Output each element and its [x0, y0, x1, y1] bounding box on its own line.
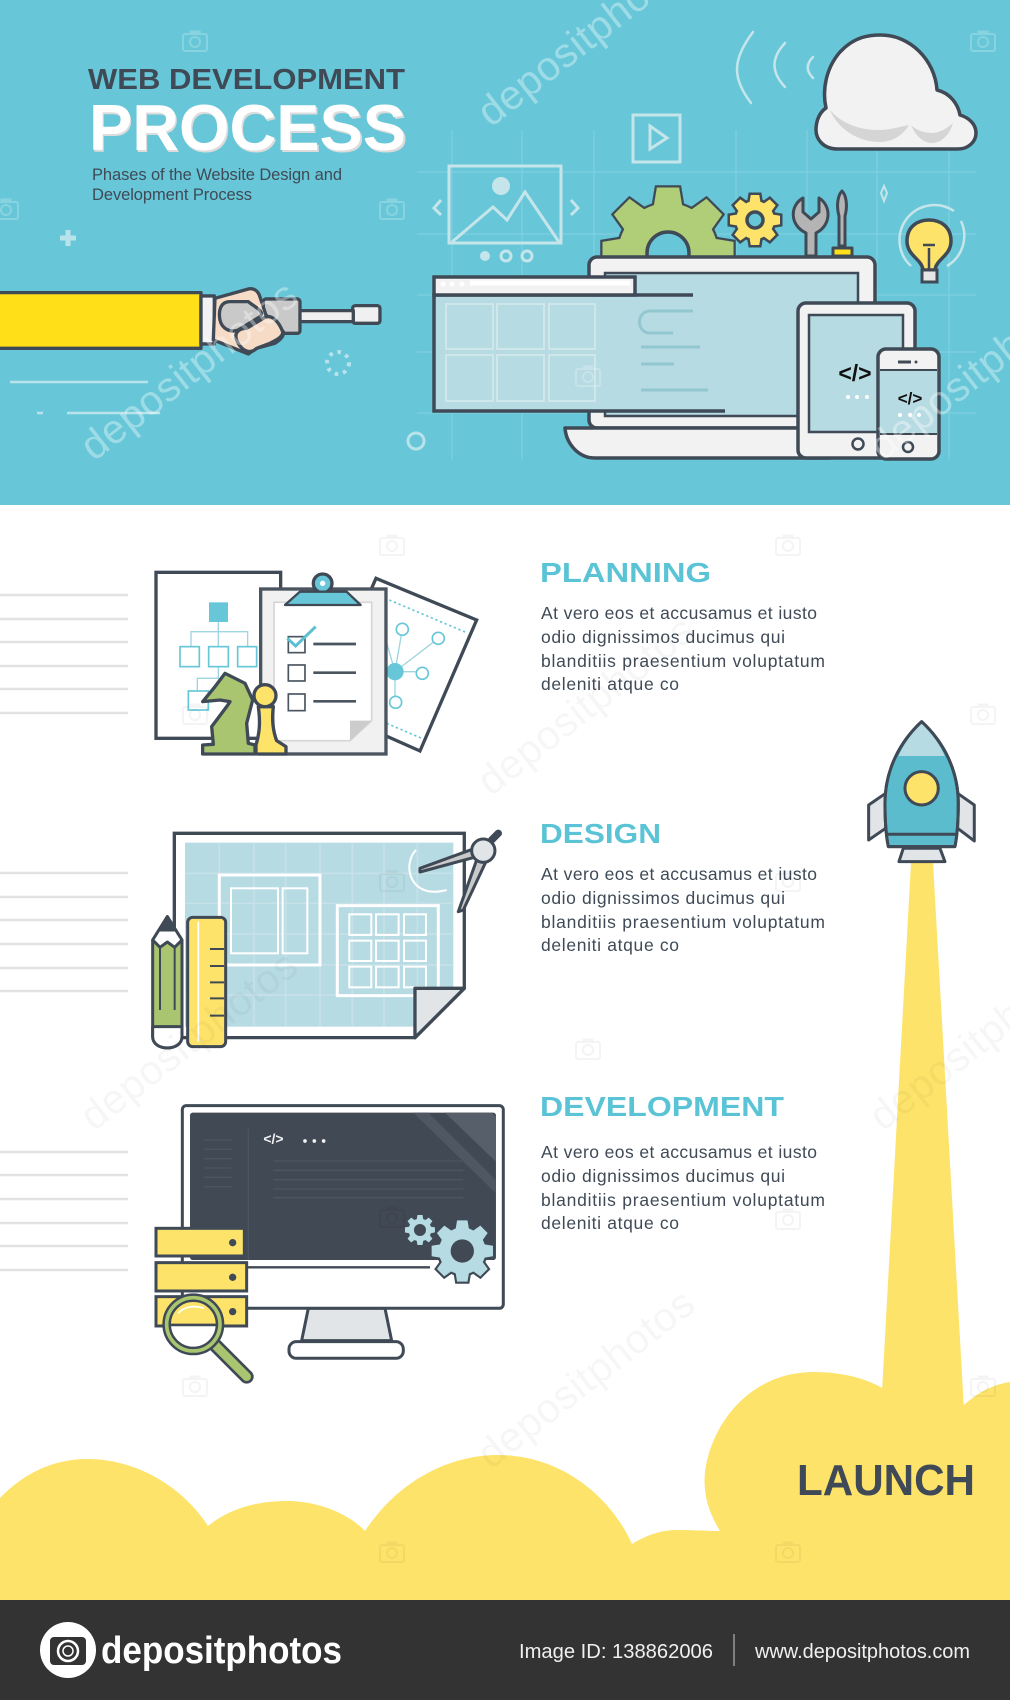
- section: design: deleniti atque co: [541, 935, 679, 955]
- blueprint sheet: [174, 833, 464, 1038]
- icon: play box: [633, 115, 680, 162]
- arm holding screwdriver: [0, 289, 380, 354]
- compass: [420, 833, 498, 912]
- clipboard: [261, 574, 386, 754]
- section: development: deleniti atque co: [541, 1213, 679, 1233]
- monitor: </>: [263, 1130, 284, 1146]
- subtitle: [92, 166, 342, 204]
- section: planning: odio dignissimos ducimus qui: [541, 627, 785, 647]
- watermarks: depositphotos: [468, 1280, 703, 1477]
- left stripes: [0, 595, 128, 1270]
- tablet: [798, 303, 915, 458]
- section: development: blanditiis praesentium voluptatum: [541, 1190, 825, 1210]
- watermarks: depositphotos: [71, 942, 306, 1139]
- browser window: [434, 277, 725, 411]
- watermarks: depositphotos: [468, 607, 703, 804]
- network sheet: [320, 578, 477, 751]
- rocket flame: [881, 863, 964, 1410]
- section: development: [540, 1091, 825, 1233]
- laptop: [565, 257, 875, 458]
- footer url: www.depositphotos.com: [754, 1641, 970, 1663]
- footer logo: [40, 1622, 342, 1678]
- subtitle: Development Process: [92, 186, 252, 204]
- knight: [203, 673, 255, 754]
- icon: light bulb: [900, 205, 964, 282]
- pawn: [254, 685, 286, 754]
- illustration: design: [153, 833, 498, 1048]
- magnifier: [163, 1297, 247, 1377]
- section: development: odio dignissimos ducimus qui: [541, 1166, 785, 1186]
- icon: small yellow gear: [730, 195, 780, 245]
- title: WEB DEVELOPMENT: [88, 64, 405, 96]
- icon: wrench: [793, 198, 828, 256]
- monitor: [182, 1106, 503, 1358]
- footer bar: [0, 1600, 1010, 1700]
- ruler: [188, 917, 226, 1047]
- illustration: planning: [156, 572, 477, 754]
- icon: image carousel: [434, 166, 578, 261]
- icon: sparkle: [881, 186, 887, 201]
- section: development: At vero eos et accusamus et iusto: [541, 1142, 817, 1162]
- icon: cloud: [816, 35, 976, 149]
- launch clouds: [0, 1372, 1010, 1600]
- tablet: </>: [838, 360, 872, 386]
- section: design: At vero eos et accusamus et iusto: [541, 864, 817, 884]
- icon: large green gear: [600, 185, 736, 256]
- org chart sheet: [156, 572, 281, 738]
- launch label: LAUNCH: [797, 1456, 975, 1505]
- header panel background: [0, 0, 1010, 505]
- subtitle: Phases of the Website Design and: [92, 166, 342, 184]
- illustration: development: [156, 1106, 503, 1377]
- smartphone: </>: [898, 389, 922, 408]
- section: design: DESIGN: [540, 818, 661, 849]
- section: design: [540, 818, 825, 955]
- section: planning: blanditiis praesentium voluptatum: [541, 651, 825, 671]
- faint blueprint grid behind devices: [417, 130, 976, 460]
- decorative marks left of header: [10, 230, 424, 449]
- icon: screwdriver: [833, 191, 852, 256]
- page body background: [0, 505, 1010, 1600]
- section: planning: At vero eos et accusamus et iusto: [541, 603, 817, 623]
- section: planning: [540, 557, 825, 694]
- smartphone: [878, 349, 939, 459]
- pencil: [153, 917, 182, 1048]
- footer logo: depositphotos: [101, 1630, 342, 1672]
- signal arcs: [737, 32, 813, 103]
- watermarks: depositphotos: [71, 272, 306, 469]
- footer image id: Image ID: 138862006: [519, 1641, 713, 1663]
- section: design: odio dignissimos ducimus qui: [541, 888, 785, 908]
- server stack: [156, 1228, 247, 1326]
- title: PROCESS: [89, 91, 406, 164]
- icon: rocket: [869, 722, 974, 862]
- section: design: blanditiis praesentium voluptatum: [541, 912, 825, 932]
- section: planning: deleniti atque co: [541, 674, 679, 694]
- section: planning: PLANNING: [540, 557, 711, 588]
- title: PROCESS: [90, 93, 408, 166]
- gears: [405, 1215, 493, 1282]
- section: development: DEVELOPMENT: [540, 1091, 784, 1122]
